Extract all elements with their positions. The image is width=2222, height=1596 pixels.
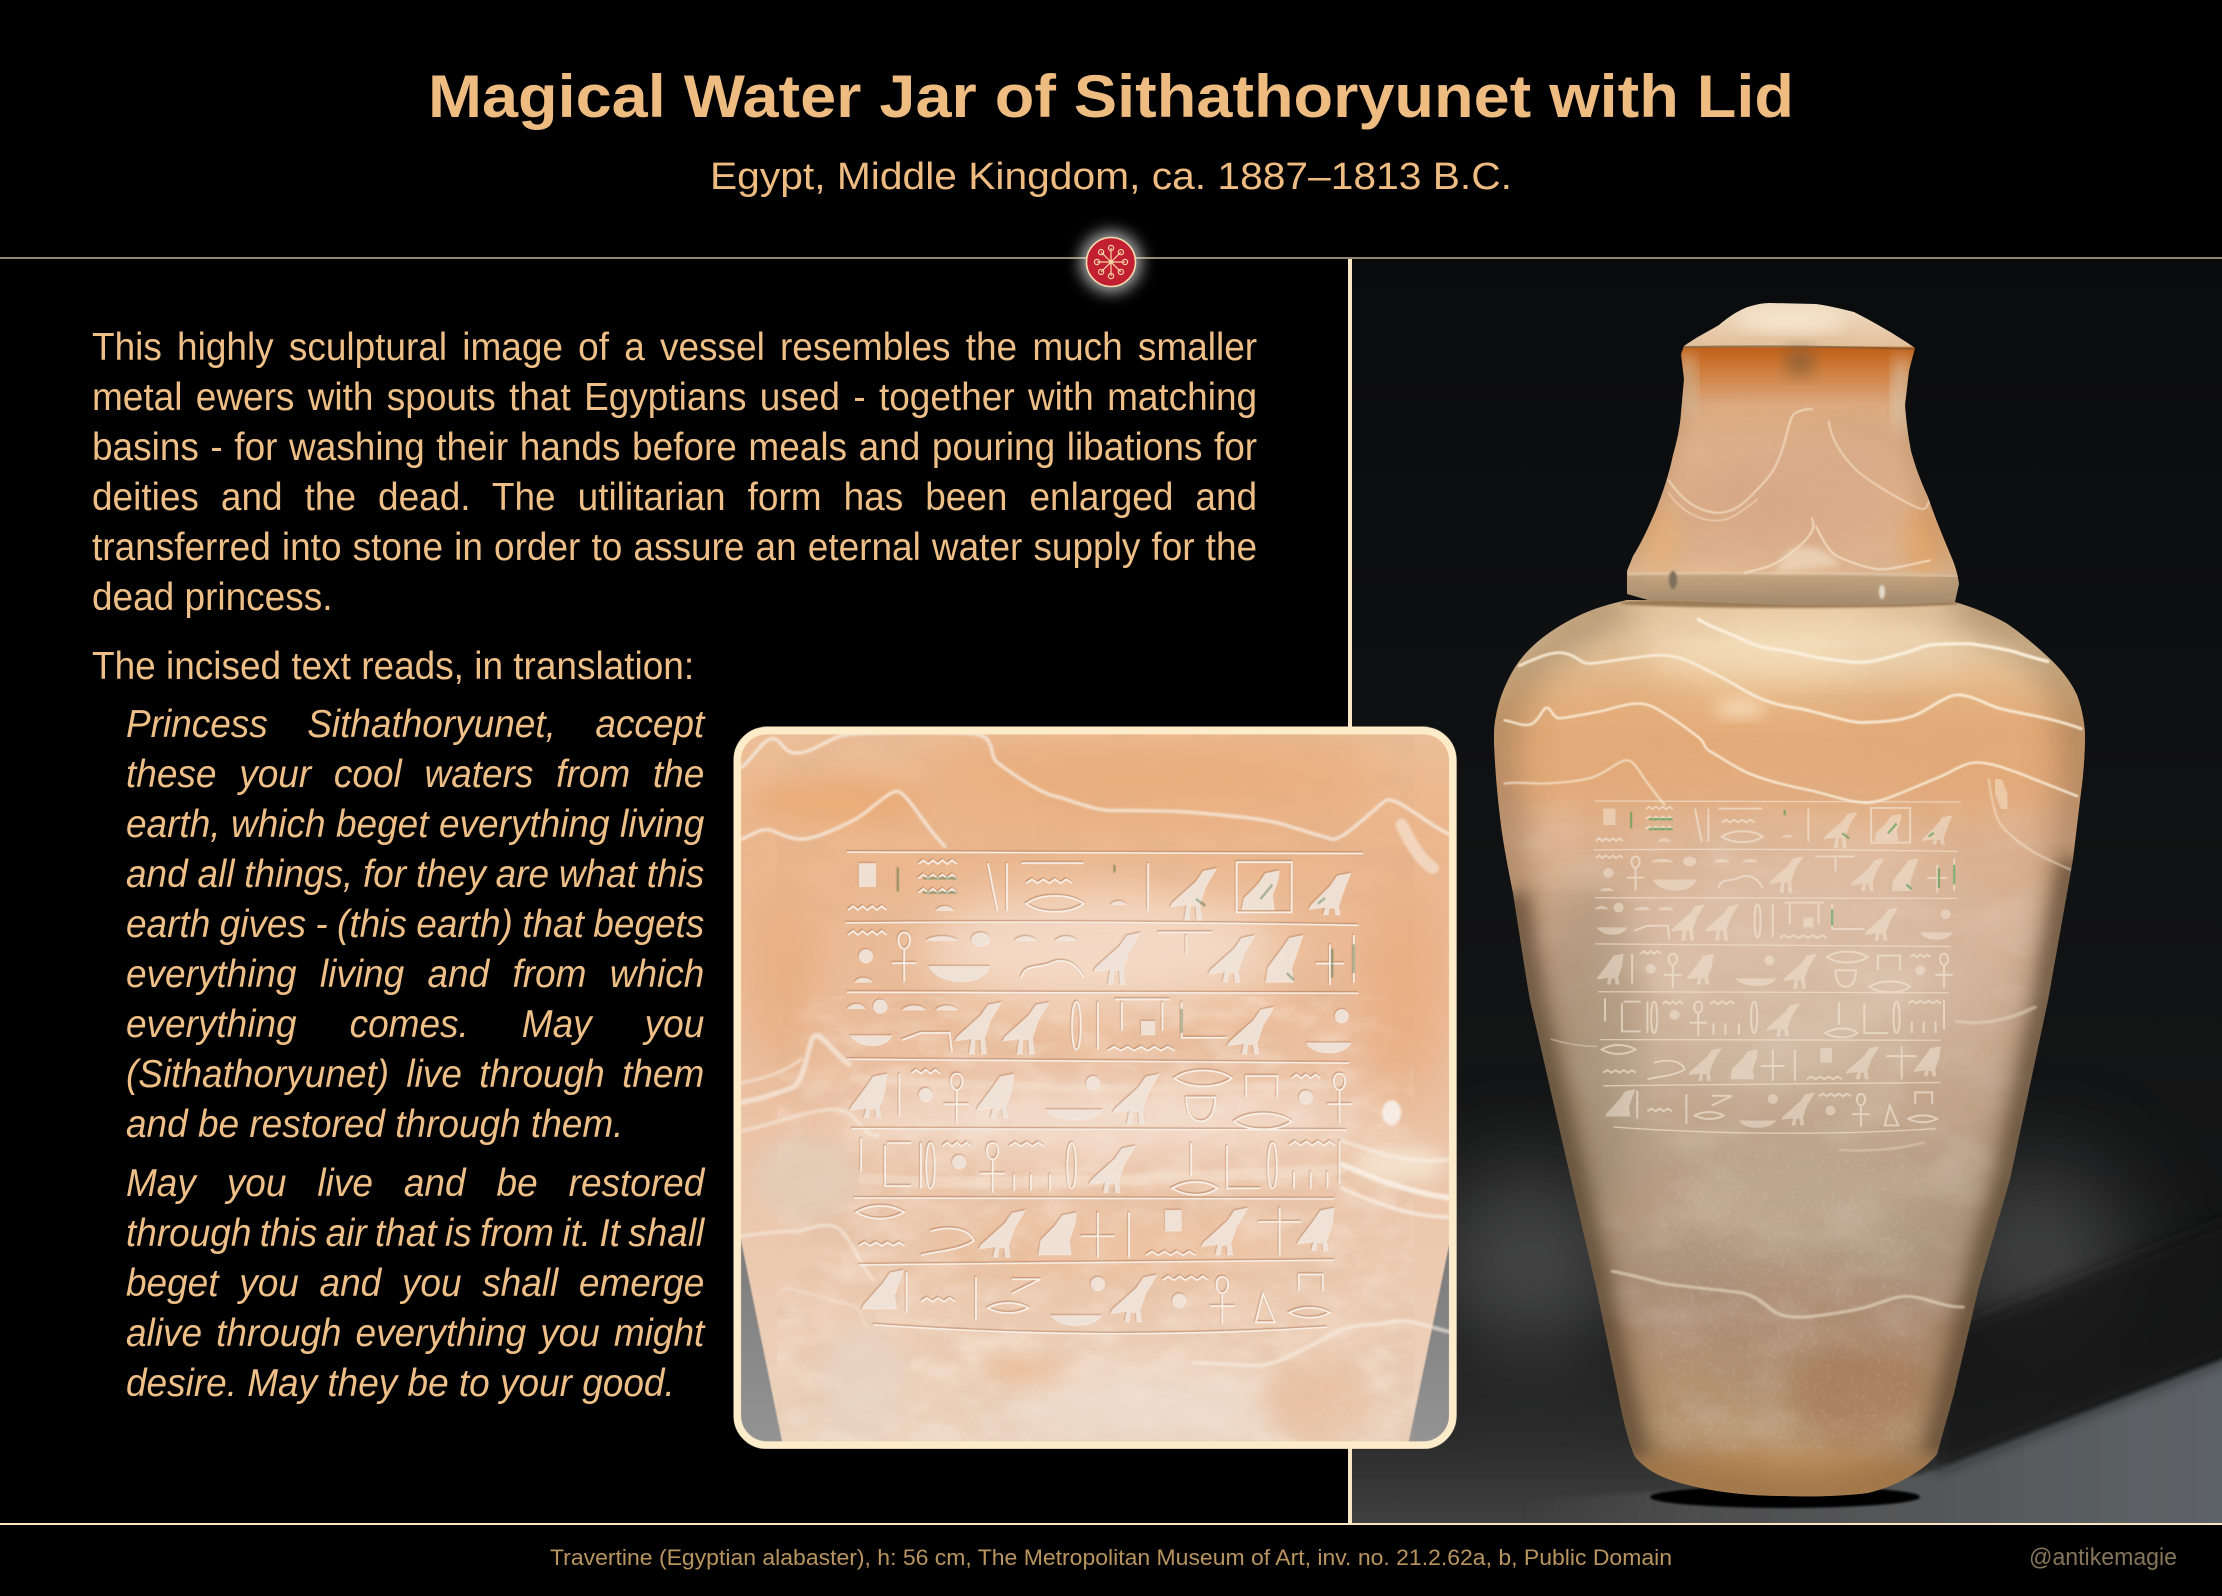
travertine bands: lower body bbox=[1552, 1007, 2035, 1317]
translation quote: first paragraph: earth gives - (this earth) that begets bbox=[126, 903, 704, 946]
close-up travertine bands bbox=[742, 732, 1449, 1365]
translation quote: first paragraph: and all things, for they are what this bbox=[126, 853, 704, 896]
jar inscription bbox=[1594, 801, 1961, 1133]
body paragraph: dead princess. bbox=[92, 576, 332, 619]
translation quote: first paragraph: Princess Sithathoryunet, accept bbox=[126, 703, 704, 746]
translation quote: second paragraph: desire. May they be to your good. bbox=[126, 1362, 675, 1405]
body paragraph: deities and the dead. The utilitarian form has been enlarged and bbox=[92, 476, 1257, 519]
translation quote: first paragraph: and be restored through them. bbox=[126, 1103, 623, 1146]
body paragraph: This highly sculptural image of a vessel resembles the much smaller bbox=[92, 326, 1257, 369]
translation quote: second paragraph bbox=[126, 1162, 706, 1405]
studio background bbox=[1352, 259, 2222, 1560]
subtitle: Egypt, Middle Kingdom, ca. 1887–1813 B.C. bbox=[710, 156, 1512, 198]
orange zone below the shoulder bbox=[1500, 670, 2090, 830]
translation quote: second paragraph: through this air that is from it. It shall bbox=[126, 1212, 704, 1255]
body paragraph bbox=[92, 326, 1257, 619]
travertine bands: shoulder bbox=[1505, 619, 2081, 872]
panel: jar photograph bbox=[1352, 259, 2222, 1523]
translation quote: first paragraph: earth, which beget everything living bbox=[126, 803, 704, 846]
vertical divider bbox=[1348, 258, 1352, 1524]
shadow cast by the lid bbox=[1620, 598, 1960, 608]
jar body bbox=[1480, 590, 2100, 1510]
credit line: Travertine (Egyptian alabaster), h: 56 cm, The Metropolitan Museum of Art, inv. no. 21.2.62a, b, Public Domain bbox=[550, 1545, 1672, 1570]
translation quote: first paragraph: (Sithathoryunet) live through them bbox=[126, 1053, 704, 1096]
body paragraph: transferred into stone in order to assure an eternal water supply for the bbox=[92, 526, 1257, 569]
translation quote: first paragraph: these your cool waters from the bbox=[126, 753, 704, 796]
body paragraph: basins - for washing their hands before meals and pouring libations for bbox=[92, 426, 1257, 469]
translation quote: second paragraph: May you live and be restored bbox=[126, 1162, 704, 1205]
inset cream frame bbox=[737, 731, 1453, 1445]
inset: close-up of the inscription bbox=[734, 726, 1457, 1449]
jar lid bbox=[1620, 300, 1965, 610]
body paragraph: metal ewers with spouts that Egyptians used - together with matching bbox=[92, 376, 1257, 419]
translation intro: The incised text reads, in translation: bbox=[92, 645, 694, 688]
title: Magical Water Jar of Sithathoryunet with Lid bbox=[428, 63, 1794, 130]
incised hieroglyph rows bbox=[845, 852, 1363, 1334]
lid travertine scallops bbox=[1669, 409, 1930, 573]
translation quote: second paragraph: alive through everything you might bbox=[126, 1312, 704, 1355]
header rule bbox=[0, 257, 2222, 259]
icon: red seal badge bbox=[1069, 220, 1153, 304]
translation quote: first paragraph bbox=[126, 703, 706, 1146]
close-up stone surface bbox=[740, 734, 1450, 1442]
handle: @antikemagie bbox=[2029, 1544, 2177, 1571]
translation quote: second paragraph: beget you and you shall emerge bbox=[126, 1262, 704, 1305]
translation quote: first paragraph: everything living and from which bbox=[126, 953, 704, 996]
translation quote: first paragraph: everything comes. May you bbox=[126, 1003, 704, 1046]
footer rule bbox=[0, 1523, 2222, 1525]
